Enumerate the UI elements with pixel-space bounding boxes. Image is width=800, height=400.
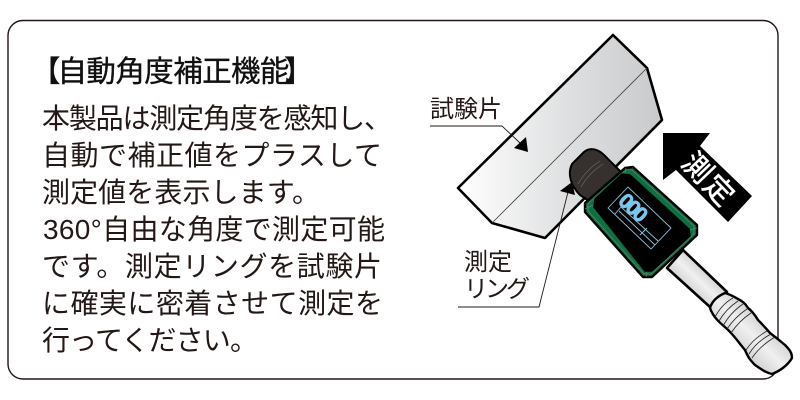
test piece block	[458, 35, 662, 238]
label: measuring ring callout: リング	[464, 276, 530, 303]
arrow: measuring direction	[663, 133, 752, 222]
label: test piece callout	[430, 96, 528, 152]
text block: description: 測定値を表示します。	[42, 177, 320, 208]
heading: 】	[284, 56, 314, 88]
text block: description: に確実に密着させて測定を	[42, 288, 383, 319]
label: measuring ring callout: 測定	[464, 249, 512, 276]
measuring ring cap	[570, 149, 622, 203]
text block: description: 自動で補正値をプラスして	[42, 140, 382, 171]
handle shaft	[667, 250, 727, 307]
text block: description: 本製品は測定角度を感知し、	[42, 103, 392, 134]
label: test piece callout: 試験片	[430, 96, 502, 123]
text block: description: です。測定リングを試験片	[42, 251, 382, 282]
gauge screen	[594, 174, 690, 271]
screen reading: 000	[614, 189, 652, 227]
heading: 【	[31, 56, 61, 88]
handle grip	[710, 293, 792, 374]
heading: 自動角度補正機能	[58, 56, 290, 88]
screen outlines	[608, 187, 671, 249]
arrow label: 測定	[675, 146, 741, 212]
text block: description	[42, 103, 392, 356]
label: measuring ring callout	[458, 182, 575, 307]
digital gauge body	[585, 167, 697, 277]
text block: description: 360°自由な角度で測定可能	[43, 214, 385, 245]
text block: description: 行ってください。	[42, 325, 258, 356]
